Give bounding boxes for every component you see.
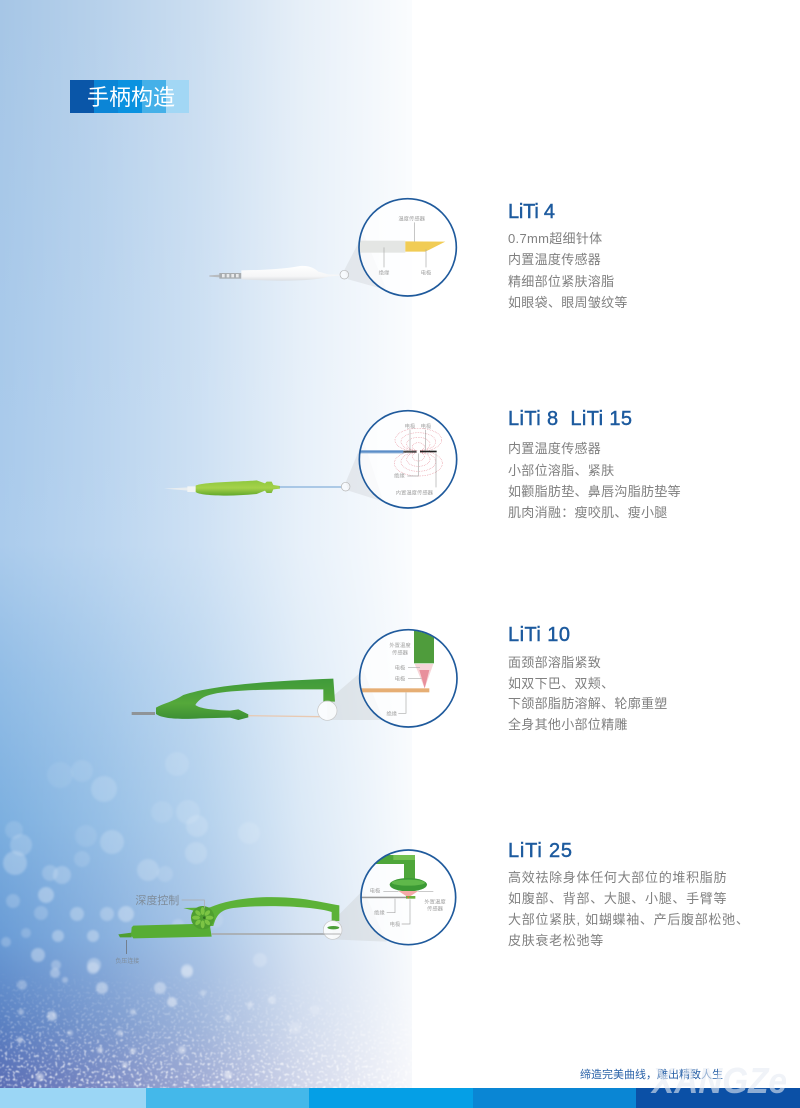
bottom colour bar (0, 1088, 800, 1108)
text: LiTi 10: 面颈部溶脂紧致 (508, 655, 601, 670)
text: LiTi 4: LiTi 4 (508, 201, 555, 223)
text: LiTi 8 LiTi 15: 内置温度传感器 (508, 441, 601, 456)
detail circle: 温度传感器 (398, 215, 426, 223)
text: LiTi 8 LiTi 15: 小部位溶脂、紧肤 (508, 463, 614, 478)
text: LiTi 10: LiTi 10 (508, 624, 570, 646)
heading: 手柄构造: 手柄构造 (87, 85, 175, 110)
text: LiTi 10: 如双下巴、双颊、 (508, 676, 614, 691)
label: 深度控制: 深度控制 (135, 893, 179, 907)
product: LiTi 25 handle and detail (115, 850, 456, 965)
detail circle: 电极 (395, 674, 406, 682)
text: LiTi 25: 皮肤衰老松弛等 (508, 933, 604, 948)
detail circle: 电极 (421, 269, 432, 277)
label: 深度控制 (135, 893, 204, 908)
text: LiTi 8 LiTi 15 (508, 408, 681, 520)
handle (209, 266, 340, 281)
text: LiTi 8 LiTi 15: 肌肉消融：瘦咬肌、瘦小腿 (508, 505, 668, 520)
zoom marker (323, 921, 342, 939)
detail circle: 外置温度 (389, 641, 411, 649)
zoom marker (341, 482, 350, 491)
heading: 手柄构造 (70, 80, 189, 113)
text: LiTi 8 LiTi 15: 如颧脂肪垫、鼻唇沟脂肪垫等 (508, 484, 681, 499)
detail circle: 内置温度传感器 (396, 489, 434, 497)
detail circle (358, 411, 457, 508)
text: LiTi 4 (508, 201, 628, 310)
zoom cone (344, 233, 387, 290)
detail circle: 传感器 (427, 904, 444, 912)
detail circle: 绝缘 (374, 909, 385, 917)
detail circle (357, 199, 456, 296)
text: LiTi 4: 0.7mm超细针体 (508, 231, 602, 246)
label: 负压连接: 负压连接 (115, 957, 139, 965)
product: LiTi 8 / LiTi 15 handle and detail (164, 411, 457, 508)
text: LiTi 10: 下颌部脂肪溶解、轮廓重塑 (508, 696, 668, 711)
product: LiTi 4 handle and detail (209, 199, 456, 296)
text: LiTi 25: 如腹部、背部、大腿、小腿、手臂等 (508, 891, 727, 906)
detail circle: 绝缘 (386, 709, 398, 717)
background: blue gradient panel with bokeh and glitter (0, 0, 412, 1090)
detail circle: 电极 (421, 422, 432, 430)
detail circle: 传感器 (392, 648, 409, 656)
text: LiTi 10: 全身其他小部位精雕 (508, 717, 628, 732)
detail circle: 电极 (370, 887, 381, 895)
detail circle (360, 628, 457, 727)
handle (118, 897, 339, 938)
text: LiTi 4: 如眼袋、眼周皱纹等 (508, 295, 628, 310)
text: LiTi 10 (508, 624, 668, 732)
text: LiTi 25: 高效祛除身体任何大部位的堆积脂肪 (508, 870, 727, 885)
zoom cone (333, 890, 387, 942)
zoom cone (327, 670, 383, 720)
watermark: XANGZe (650, 1060, 787, 1101)
handle (132, 679, 335, 720)
text: LiTi 4: 内置温度传感器 (508, 252, 601, 267)
text: LiTi 25 (508, 840, 750, 948)
zoom cone (346, 440, 383, 502)
detail circle (360, 850, 456, 945)
text: LiTi 25: 大部位紧肤, 如蝴蝶袖、产后腹部松弛、 (508, 912, 750, 927)
detail circle: 电极 (395, 663, 406, 671)
detail circle: 外置温度 (424, 898, 446, 906)
zoom marker (318, 701, 337, 720)
tagline: 缔造完美曲线，雕出精致人生 (580, 1067, 723, 1081)
zoom marker (340, 270, 349, 279)
detail circle: 绝缘 (379, 269, 390, 277)
text: LiTi 4: 精细部位紧肤溶脂 (508, 274, 614, 289)
text: LiTi 25: LiTi 25 (508, 840, 572, 862)
detail circle: 电极 (390, 920, 401, 928)
detail circle: 电极 (405, 422, 416, 430)
detail circle: 绝缘 (394, 472, 405, 480)
text: LiTi 8 LiTi 15: LiTi 8 LiTi 15 (508, 408, 632, 430)
product: LiTi 10 handle and detail (132, 628, 457, 727)
handle (164, 480, 342, 496)
label: 负压连接 (115, 940, 139, 965)
